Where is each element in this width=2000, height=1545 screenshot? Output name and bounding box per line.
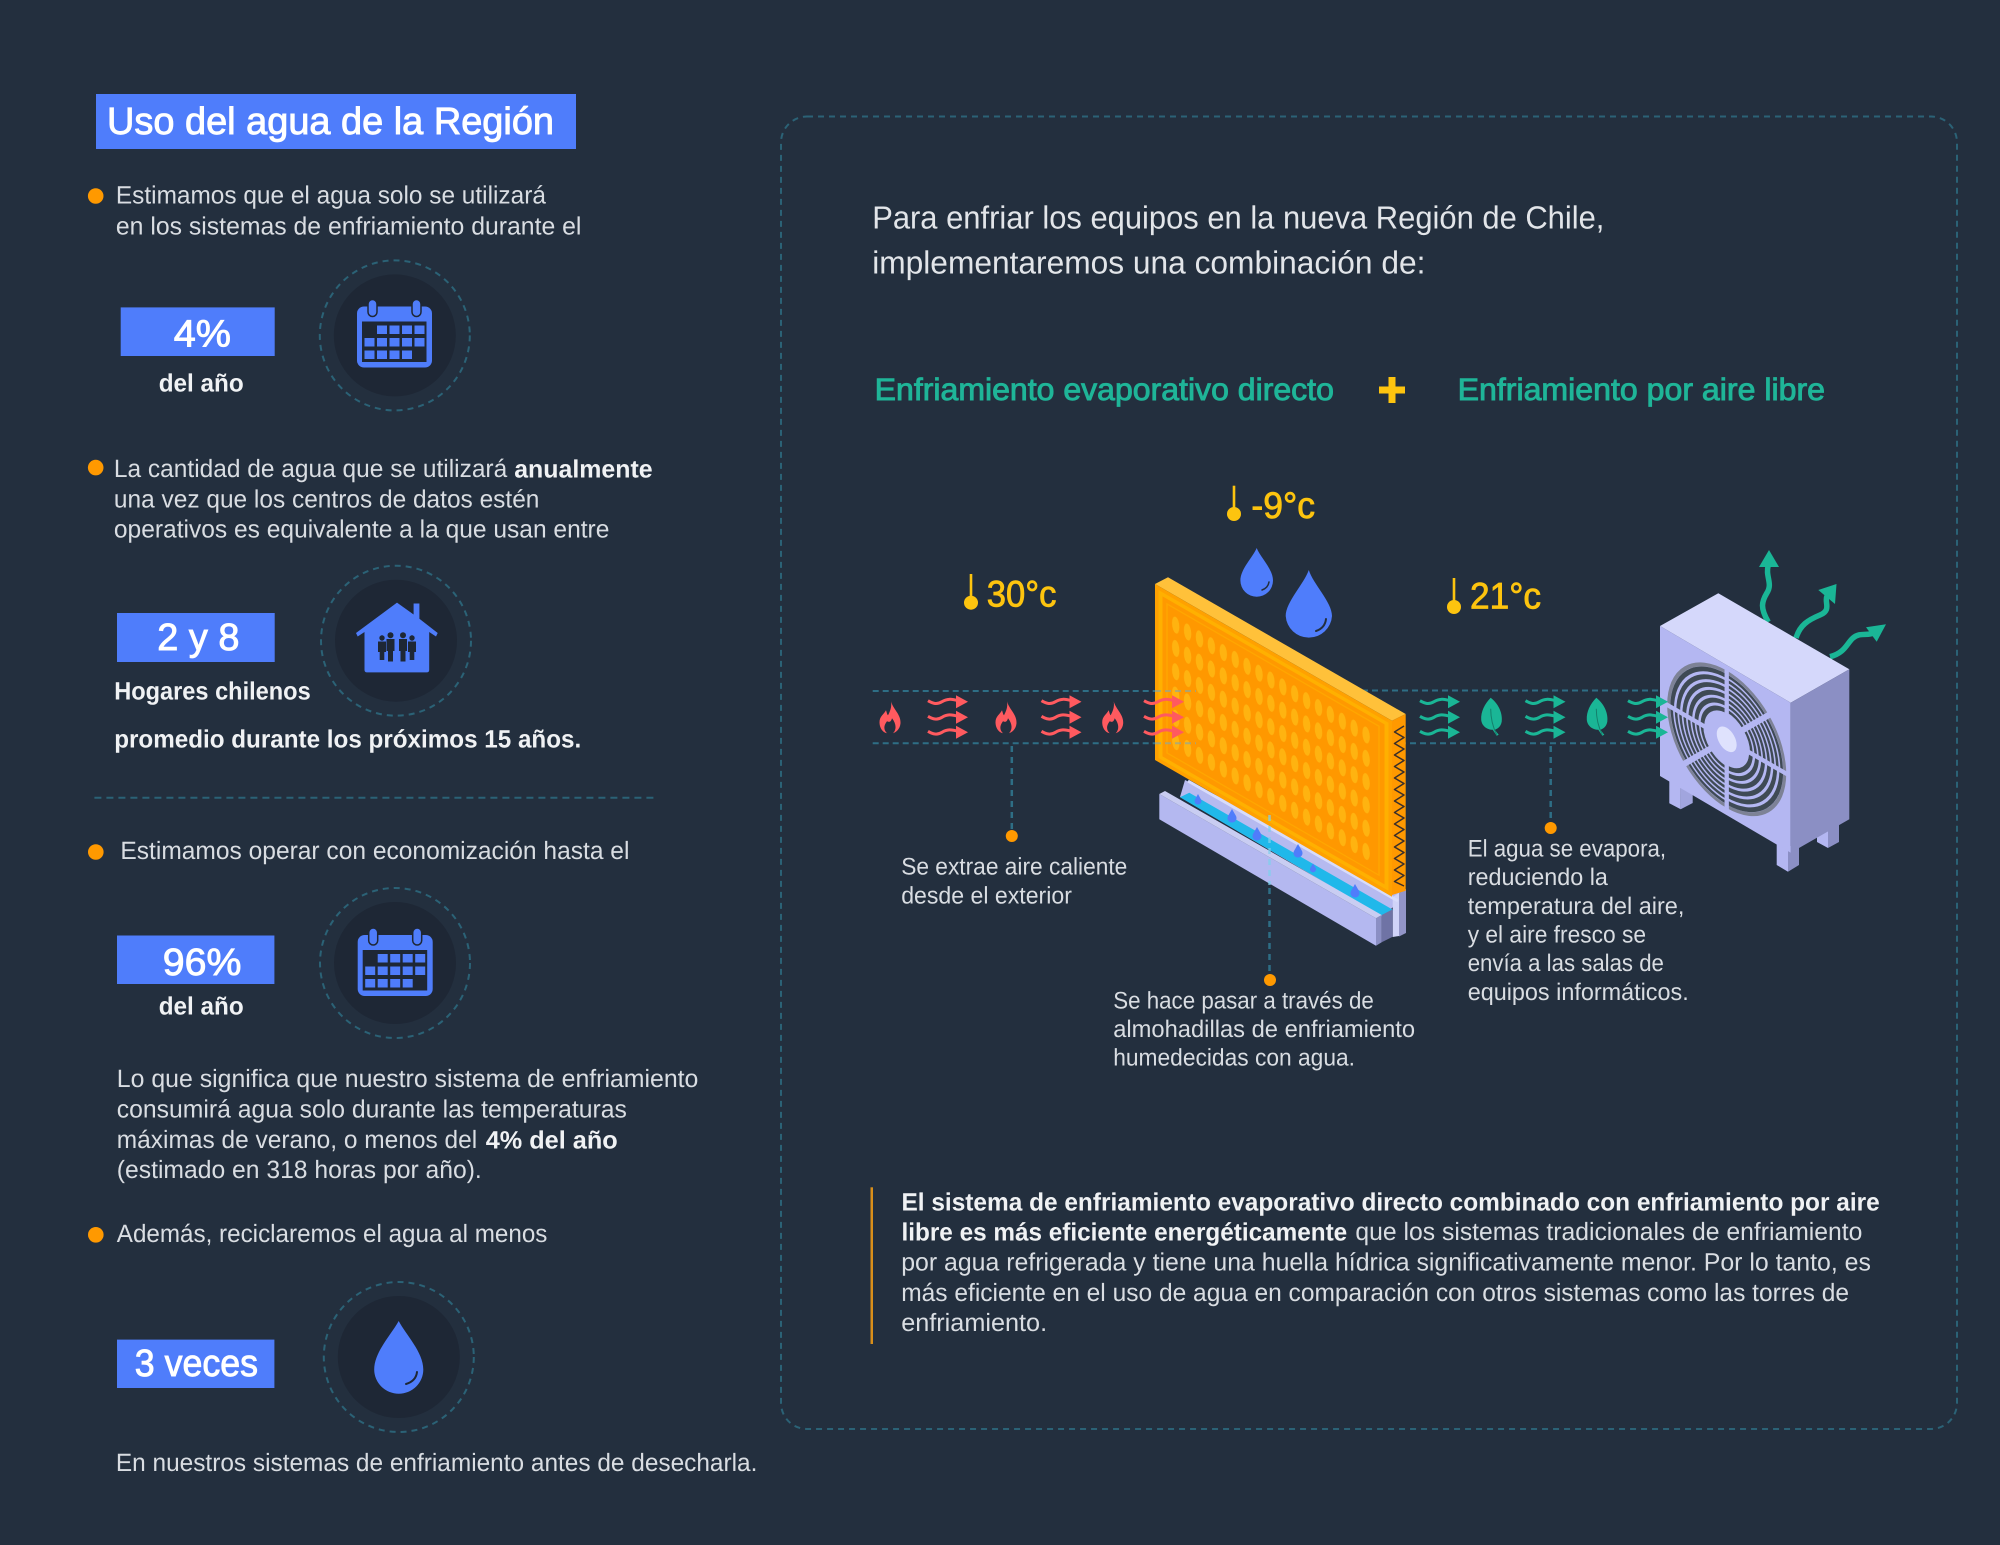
bullet block: households: una vez que los centros de datos estén [114,486,539,514]
airflow band right side lines [1362,690,1668,743]
callout: water evaporates [1468,746,1689,1006]
icon: plus [1379,377,1405,403]
callout: passes through wet pads: almohadillas de enfriamiento [1113,1016,1415,1043]
callout: water evaporates: envía a las salas de [1468,950,1664,977]
stat: 96% del año: 96% [163,942,241,984]
stat: 4% del año: del año [159,370,244,398]
stat: 4% del año: 4% [174,314,231,356]
stat: 4% del año [121,307,275,398]
bullet block: households: La cantidad de agua que se utilizará [114,455,507,483]
text block: efficiency conclusion: libre es más eficiente energéticamente [901,1219,1347,1247]
heading: direct evaporative cooling: Enfriamiento evaporativo directo [875,372,1334,407]
bullet block: 4% of the year: Estimamos que el agua solo se utilizará [116,182,546,210]
legs [1669,780,1839,872]
text block: efficiency conclusion: por agua refrigerada y tiene una huella hídrica significativamente menor. Por lo tanto, es [901,1249,1871,1277]
icon: water drop in circle [324,1282,474,1432]
callout: passes through wet pads [1113,815,1415,1071]
text block: efficiency conclusion: enfriamiento. [901,1309,1047,1337]
callout: hot air extracted [901,746,1127,909]
bullet block: households: operativos es equivalente a la que usan entre [114,515,609,543]
icon: calendar in circle [320,888,470,1038]
bullet block: economization: Estimamos operar con economización hasta el [120,837,629,865]
callout: hot air extracted: Se extrae aire caliente [901,854,1127,881]
arrows: exhaust from unit [1759,550,1886,657]
heading: free air cooling: Enfriamiento por aire libre [1458,372,1825,407]
airflow band left side lines [873,691,1196,743]
text block: efficiency conclusion: más eficiente en el uso de agua en comparación con otros sistemas como las torres de [901,1279,1849,1307]
stat: 96% del año [117,936,274,1021]
panel: left column water use [88,94,757,1477]
text block: meaning of economization: Lo que significa que nuestro sistema de enfriamiento [117,1065,698,1093]
icons: flames [880,701,1123,733]
cooling trough with water [1159,780,1406,946]
stat: 3 veces: 3 veces [135,1343,258,1385]
bullet block: 4% of the year [88,182,581,240]
icons: leaves [1481,698,1607,736]
bullet block: 4% of the year: en los sistemas de enfriamiento durante el [116,213,581,241]
stat: 2 y 8 hogares: promedio durante los próximos 15 años. [114,726,581,754]
bullet block: recycling: Además, reciclaremos el agua al menos [117,1220,547,1248]
bullet block: households [88,455,653,544]
callout: passes through wet pads: Se hace pasar a través de [1113,988,1374,1015]
stat: 2 y 8 hogares: Hogares chilenos [114,678,311,706]
temperature: 21: 21°c [1470,576,1541,616]
temperature: 30: 30°c [987,574,1056,615]
bullet block: households: anualmente [514,456,653,484]
text block: meaning of economization: consumirá agua solo durante las temperaturas [117,1096,627,1124]
temperature: -9: -9°c [1251,485,1315,526]
intro text: implementaremos una combinación de: [872,245,1425,281]
text block: meaning of economization: (estimado en 318 horas por año). [117,1156,482,1184]
callout: water evaporates: El agua se evapora, [1468,836,1666,863]
text block: efficiency conclusion [870,1187,1880,1344]
callout: water evaporates: equipos informáticos. [1468,979,1689,1006]
arrows: hot air [928,695,1184,739]
stat: 2 y 8 hogares [114,613,581,754]
intro text: Para enfriar los equipos en la nueva Región de Chile, [872,200,1604,236]
stat: 2 y 8 hogares: 2 y 8 [157,617,240,659]
text block: meaning of economization [117,1065,698,1184]
intro text [872,200,1604,281]
panel border [781,116,1957,1429]
callout: passes through wet pads: humedecidas con agua. [1113,1044,1355,1071]
icon: calendar in circle [320,260,470,410]
text block: meaning of economization: 4% del año [486,1126,618,1154]
icon: house with family in circle [321,566,471,716]
callout: water evaporates: reduciendo la [1468,864,1609,891]
icon: falling water drops [1240,548,1332,638]
title: Uso del agua de la Región [107,101,554,143]
text block: efficiency conclusion: El sistema de enfriamiento evaporativo directo combinado con enfriamiento por aire [901,1188,1880,1216]
panel: cooling system [781,116,1957,1429]
callout: water evaporates: y el aire fresco se [1468,921,1646,948]
fan grille [1667,662,1786,816]
icon: small drops on water [1195,794,1359,898]
divider [94,797,655,799]
cooling pad [1155,577,1406,897]
air conditioning unit [1660,593,1849,872]
stat: 96% del año: del año [159,993,244,1021]
callout: hot air extracted: desde el exterior [901,882,1072,909]
arrows: cool air [1420,695,1668,739]
text block: meaning of economization: máximas de verano, o menos del [117,1126,477,1154]
text block: efficiency conclusion: que los sistemas tradicionales de enfriamiento [1355,1218,1862,1246]
callout: water evaporates: temperatura del aire, [1468,893,1684,920]
text: before discarding: En nuestros sistemas de enfriamiento antes de desecharla. [116,1449,757,1477]
